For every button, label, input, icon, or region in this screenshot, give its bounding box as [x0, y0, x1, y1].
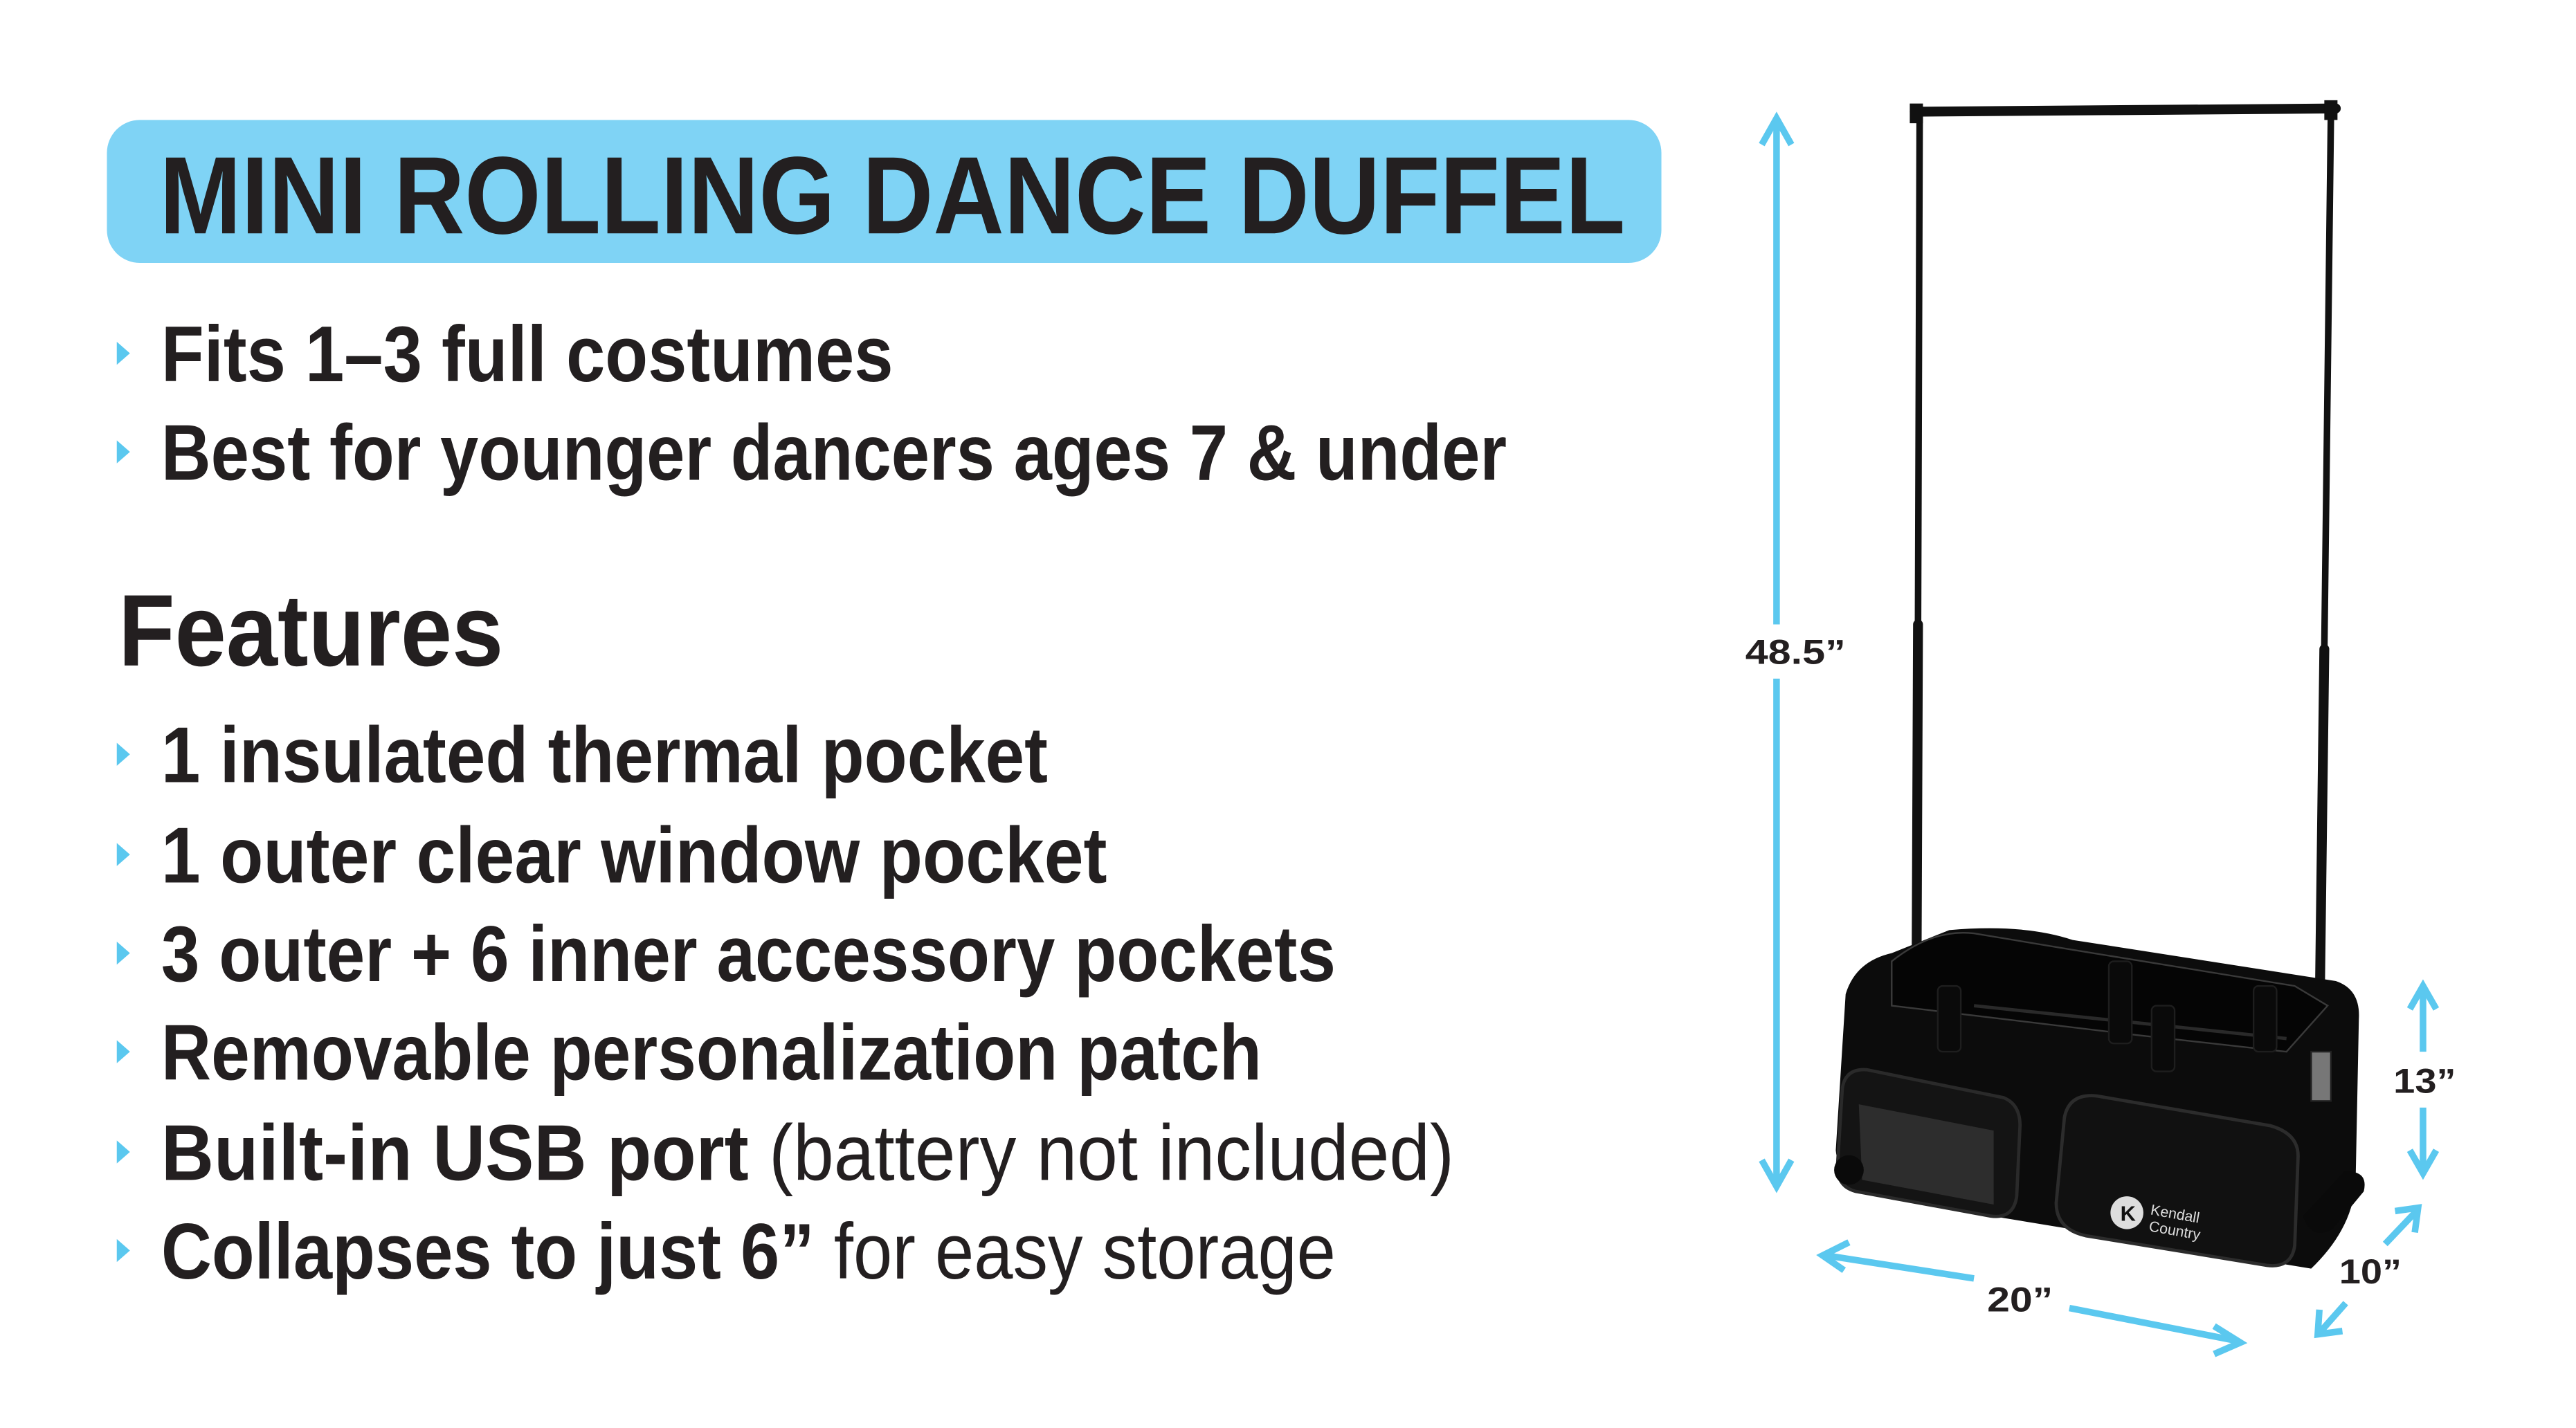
- pocket: logo patch: Kendall: [2150, 1202, 2201, 1227]
- feature: pockets: 3 outer + 6 inner accessory pockets: [161, 910, 1336, 998]
- feature: thermal: 1 insulated thermal pocket: [161, 712, 1048, 800]
- feature: patch: Removable personalization patch: [161, 1009, 1262, 1097]
- pocket: logo patch: Country: [2148, 1218, 2202, 1243]
- pocket: logo patch: [2056, 1096, 2298, 1265]
- wheel and handle: [1834, 1155, 1864, 1184]
- pocket: clear window: [1838, 1070, 2020, 1216]
- bullet: ages: Best for younger dancers ages 7 & under: [161, 410, 1507, 497]
- bag opening: [1892, 933, 2328, 1052]
- rack poles: [1910, 100, 2337, 1035]
- pocket: logo patch: K: [2121, 1202, 2137, 1226]
- dimension: height 48.5: 48.5”: [1745, 633, 1846, 672]
- feature: USB: Built-in USB port (battery not included): [161, 1109, 1454, 1197]
- dimension: width 20: 20”: [1987, 1280, 2053, 1319]
- side window: [2311, 1052, 2331, 1101]
- dimension: depth 10: [2318, 1208, 2418, 1335]
- features list: [117, 712, 1454, 1296]
- product: rolling duffel with garment rack: [1834, 100, 2365, 1269]
- title: MINI ROLLING DANCE DUFFEL: [160, 134, 1625, 257]
- feature: collapses: Collapses to just 6” for easy storage: [161, 1208, 1336, 1296]
- heading: Features: Features: [118, 574, 503, 688]
- dimension: height 13: 13”: [2393, 1061, 2456, 1100]
- dimension: width 20: [1822, 1243, 2240, 1354]
- intro bullets: [117, 311, 1507, 497]
- dimension: height 13: [2393, 986, 2456, 1173]
- handles: [1938, 961, 2276, 1072]
- bag body: [1835, 928, 2359, 1269]
- bullet: costumes: Fits 1–3 full costumes: [161, 311, 894, 399]
- feature: window: 1 outer clear window pocket: [161, 812, 1107, 899]
- dimension: height 48.5: [1745, 118, 1846, 1187]
- dimension: depth 10: 10”: [2339, 1252, 2402, 1291]
